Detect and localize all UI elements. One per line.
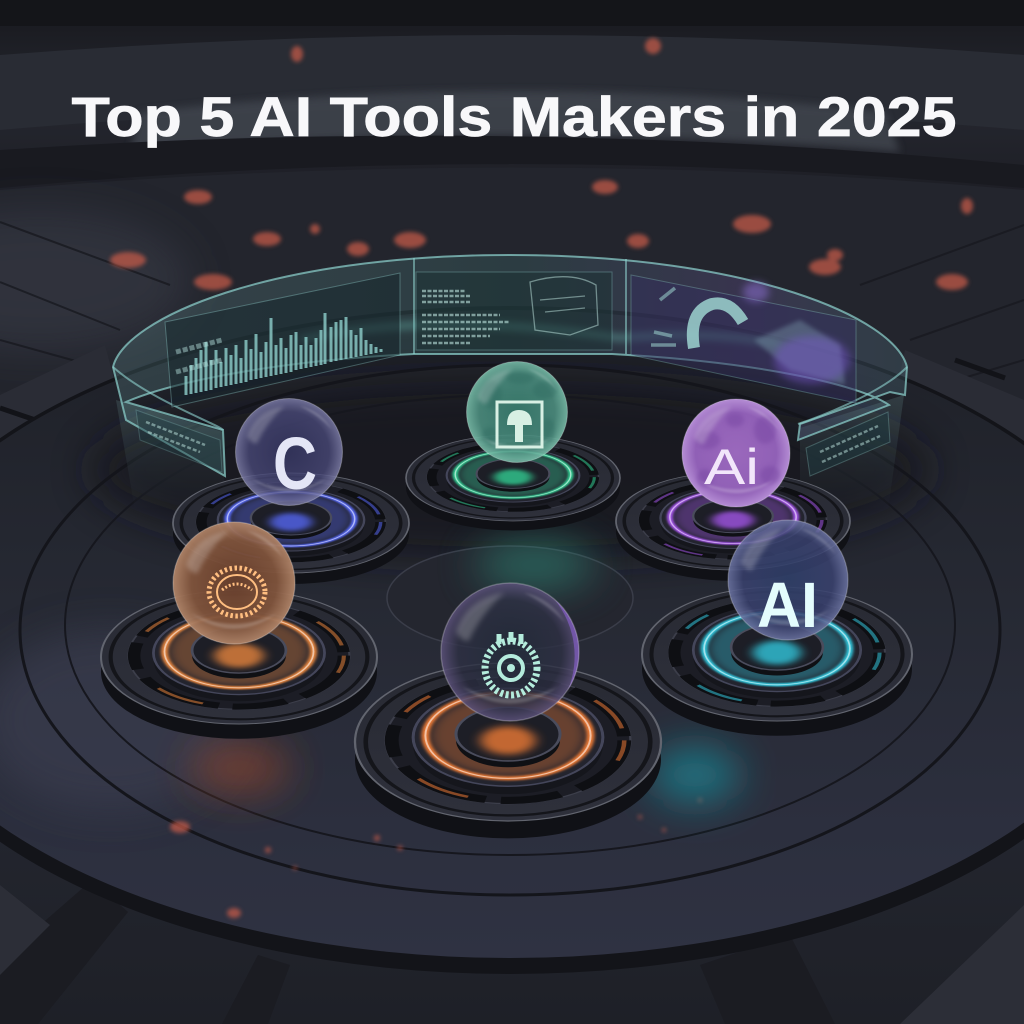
chart panel (165, 273, 400, 407)
sphere marbling (696, 413, 780, 487)
pedestal (101, 590, 377, 739)
sphere highlights (173, 522, 295, 644)
sphere highlights (466, 362, 568, 462)
item: blue C tool (173, 398, 409, 584)
glass sphere (466, 362, 568, 462)
icon: radial target emblem (485, 632, 537, 695)
sphere edge tint (555, 600, 579, 690)
sphere highlights (236, 398, 342, 506)
item: cyan AI tool (642, 520, 912, 736)
glass sphere (236, 398, 342, 506)
pedestal (642, 587, 912, 736)
side panels (136, 410, 890, 476)
glass sphere (441, 583, 579, 721)
title: Top 5 AI Tools Makers in 2025 (72, 85, 956, 148)
sphere highlights (728, 520, 848, 640)
platform: main circular disc (0, 306, 1024, 974)
pedestal (355, 663, 661, 838)
item: orange tool (101, 522, 377, 739)
glass sphere (728, 520, 848, 640)
icon: AI label: Ai (704, 439, 759, 495)
icon: lock tile (497, 402, 542, 447)
item: purple AI tool (616, 399, 850, 581)
floating red particles (110, 38, 973, 918)
pedestal (173, 473, 409, 584)
icon: letter C: C (273, 422, 317, 505)
item: dark emblem tool (front centre) (355, 583, 661, 838)
holographic curved panel (113, 255, 907, 510)
sphere highlights (441, 583, 579, 721)
pedestal (406, 435, 620, 530)
glass sphere (173, 522, 295, 644)
sphere highlights (682, 399, 790, 507)
sphere marbling (482, 372, 557, 443)
icon: AI label: AI (757, 569, 818, 641)
glow reflections under pedestals (190, 742, 740, 803)
text panel (416, 272, 612, 350)
glass sphere (682, 399, 790, 507)
item: green lock tool (406, 362, 620, 530)
gauge panel (631, 275, 856, 403)
pedestal (616, 472, 850, 581)
icon: glowing dotted emblem (209, 568, 265, 616)
